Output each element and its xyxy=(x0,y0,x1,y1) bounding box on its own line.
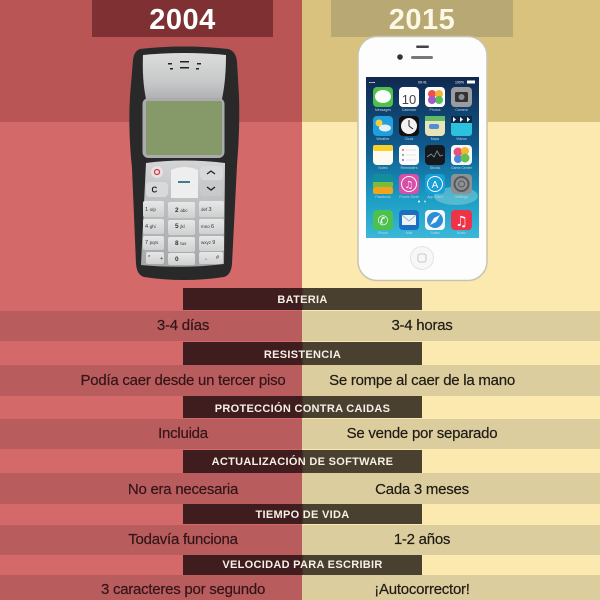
row band: 2004 batería xyxy=(0,311,302,341)
icon labels: Photos xyxy=(430,108,441,112)
category: protección xyxy=(183,396,422,418)
category: software: ACTUALIZACIÓN DE SOFTWARE xyxy=(212,456,393,468)
icon labels: Game Center xyxy=(451,166,473,170)
icon: Nokia phone: # xyxy=(216,255,220,261)
icon labels: iTunes Store xyxy=(399,195,419,199)
row band: 2004 protección xyxy=(0,419,302,449)
category: tiempo de vida xyxy=(183,504,422,524)
2015 vida value: 1-2 años xyxy=(394,531,450,548)
icon: Nokia phone: 1 o/p xyxy=(145,207,156,213)
2004 protección value: Incluida xyxy=(158,425,208,442)
category: software xyxy=(183,450,422,473)
row band: 2015 escribir xyxy=(302,575,600,600)
icon labels: Settings xyxy=(455,195,468,199)
row band: 2004 vida xyxy=(0,525,302,555)
icon labels: Safari xyxy=(430,231,440,235)
icon: Nokia phone: 8 tuv xyxy=(175,240,187,247)
category: resistencia: RESISTENCIA xyxy=(264,349,341,361)
2015 resistencia value: Se rompe al caer de la mano xyxy=(329,372,515,389)
icon labels xyxy=(375,108,473,235)
row band: 2004 software xyxy=(0,473,302,504)
icon labels: Camera xyxy=(455,108,468,112)
icon labels: App Store xyxy=(427,195,443,199)
icon labels: Reminders xyxy=(401,166,418,170)
icon grid: 10 xyxy=(402,92,416,107)
icon: Nokia phone: C xyxy=(152,186,158,194)
category: tiempo de vida: TIEMPO DE VIDA xyxy=(255,509,350,521)
icon: Nokia phone: + xyxy=(160,256,163,262)
icon grid: ♫ xyxy=(455,214,468,230)
top band: 2004 xyxy=(0,0,302,122)
icon labels: Stocks xyxy=(430,166,440,170)
icon: Nokia phone: ◦ xyxy=(205,257,207,263)
icon: Nokia phone xyxy=(129,46,240,280)
heading: 2015: 2015 xyxy=(389,4,455,36)
2004 vida value: Todavía funciona xyxy=(128,531,238,548)
heading: 2004: 2004 xyxy=(149,4,216,36)
2015 escribir value: ¡Autocorrector! xyxy=(374,581,470,598)
heading: 2004 xyxy=(92,0,273,37)
category: batería xyxy=(183,288,422,310)
row band: 2015 software xyxy=(302,473,600,504)
icon: iPhone: ••••• xyxy=(369,80,376,84)
heading: 2015 xyxy=(331,0,513,37)
2015 batería value: 3-4 horas xyxy=(391,317,453,334)
icon labels: Messages xyxy=(375,108,391,112)
row band: 2004 resistencia xyxy=(0,365,302,396)
icon labels: Clock xyxy=(405,137,414,141)
icon: Nokia phone: 7 pqrs xyxy=(145,240,159,246)
2004 batería value: 3-4 días xyxy=(157,317,209,334)
2004 escribir value: 3 caracteres por segundo xyxy=(101,581,265,598)
category: resistencia xyxy=(183,342,422,365)
icon: Nokia phone: wxyz 9 xyxy=(201,240,215,246)
icon grid: ✆ xyxy=(378,214,388,229)
icon labels: Passbook xyxy=(375,195,391,199)
category: velocidad: VELOCIDAD PARA ESCRIBIR xyxy=(222,559,383,571)
category: protección: PROTECCIÓN CONTRA CAIDAS xyxy=(215,403,390,415)
icon: Nokia phone: * xyxy=(148,255,151,261)
category: velocidad xyxy=(183,555,422,575)
icon: Nokia phone: 0 xyxy=(175,256,179,263)
icon: Nokia phone: def 3 xyxy=(201,207,212,213)
2015 protección value: Se vende por separado xyxy=(347,425,497,442)
row band: 2015 batería xyxy=(302,311,600,341)
row band: 2015 protección xyxy=(302,419,600,449)
row band: 2004 escribir xyxy=(0,575,302,600)
2004 resistencia value: Podía caer desde un tercer piso xyxy=(81,372,285,389)
icon labels: Weather xyxy=(376,137,390,141)
2015 software value: Cada 3 meses xyxy=(375,481,469,498)
icon labels: Maps xyxy=(431,137,440,141)
top band: 2015 xyxy=(302,0,600,122)
2004 software value: No era necesaria xyxy=(128,481,238,498)
row band: 2015 vida xyxy=(302,525,600,555)
panel: 2004 background xyxy=(0,0,302,600)
icon labels: Phone xyxy=(378,231,388,235)
icon: Nokia phone: 2 abc xyxy=(175,207,188,214)
icon: Nokia phone: 4 ghi xyxy=(145,224,156,230)
icon labels: Calendar xyxy=(402,108,417,112)
icon grid xyxy=(373,87,472,230)
icon: iPhone: 09:41 xyxy=(418,80,427,84)
icon grid: ♫ xyxy=(405,180,413,191)
icon: Nokia phone: mno 6 xyxy=(201,224,214,230)
icon grid: A xyxy=(432,180,439,191)
icon labels: Notes xyxy=(378,166,388,170)
icon labels: Music xyxy=(457,231,466,235)
icon labels: Videos xyxy=(456,137,467,141)
row band: 2015 resistencia xyxy=(302,365,600,396)
icon: Nokia phone: 5 jkl xyxy=(175,223,185,230)
category: batería: BATERIA xyxy=(277,294,328,306)
panel: 2015 background xyxy=(302,0,600,600)
icon: iPhone xyxy=(357,36,488,282)
icon: iPhone: 100% xyxy=(455,80,464,84)
icon labels: Mail xyxy=(406,231,412,235)
